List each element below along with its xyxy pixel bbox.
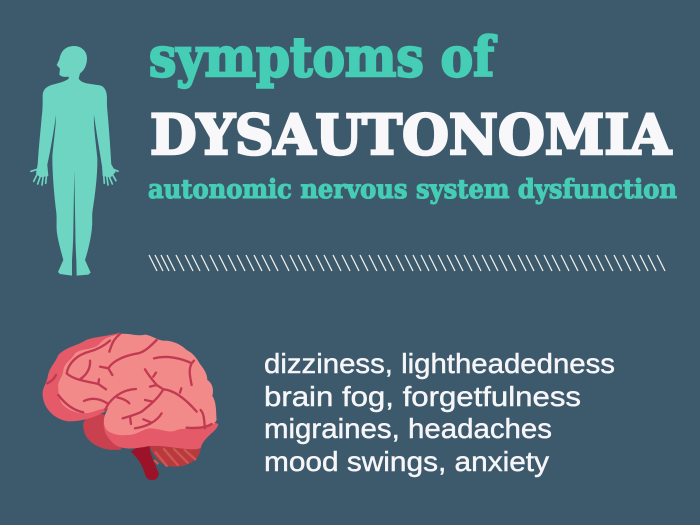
symptom list: migraines, headaches: [264, 413, 552, 444]
title: DYSAUTONOMIA: DYSAUTONOMIA: [150, 102, 672, 167]
subtitle: autonomic nervous system dysfunction: [148, 175, 677, 205]
icon: human body silhouette: [31, 46, 118, 276]
symptom list: mood swings, anxiety: [264, 446, 549, 477]
symptom list: dizziness, lightheadedness: [264, 348, 615, 379]
symptom list: [264, 348, 615, 477]
title: symptoms of: symptoms of: [149, 25, 497, 89]
icon: brain: [43, 333, 218, 480]
symptom list: brain fog, forgetfulness: [264, 381, 581, 412]
hatched divider: [149, 255, 665, 271]
